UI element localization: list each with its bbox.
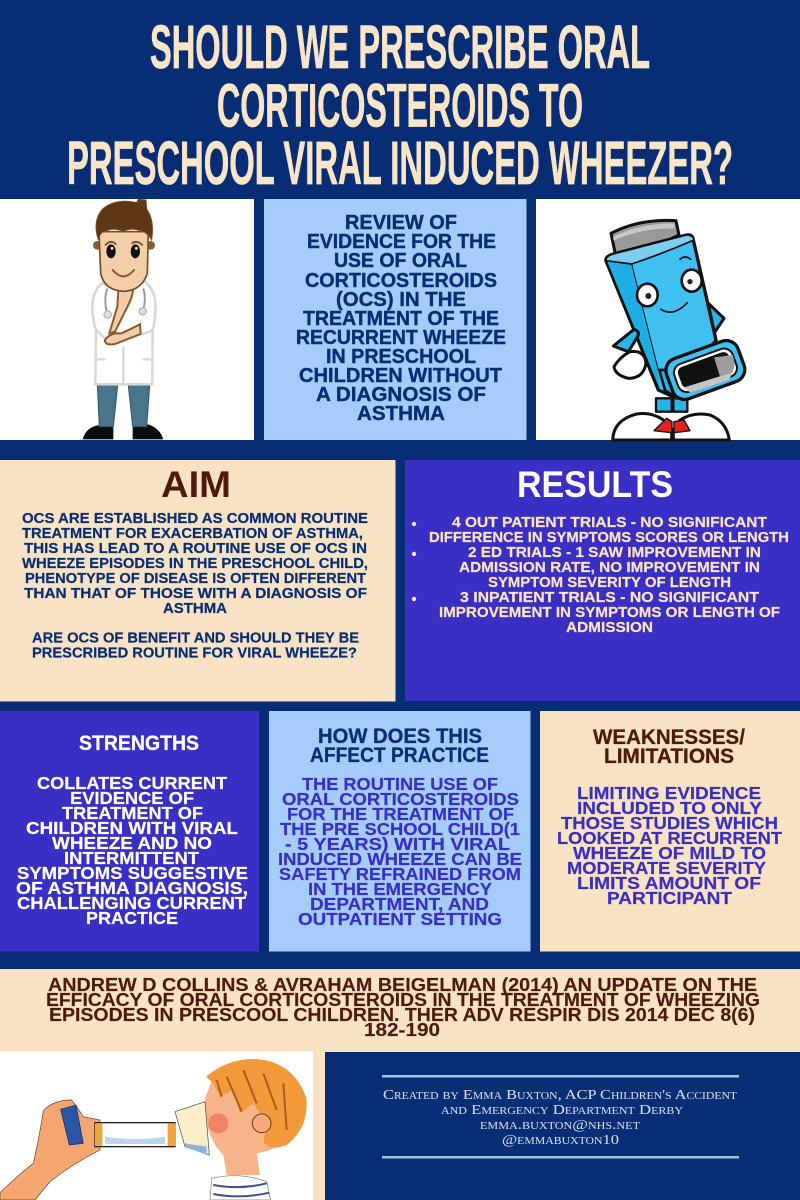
panel: citation (0, 969, 800, 1200)
text block: aim body: OCS ARE ESTABLISHED AS COMMON ROUTINE (22, 511, 368, 527)
heading: strengths: STRENGTHS (79, 732, 199, 755)
text block: strengths body: EVIDENCE OF (70, 788, 194, 808)
heading: results: RESULTS (517, 464, 673, 505)
list: results bullets: DIFFERENCE IN SYMPTOMS SCORES OR LENGTH (429, 530, 789, 546)
list: results bullets: IMPROVEMENT IN SYMPTOMS OR LENGTH OF (439, 605, 780, 621)
list: results bullets: ADMISSION RATE, NO IMPROVEMENT IN (459, 560, 760, 576)
text block: credits: @emmabuxton10 (502, 1133, 619, 1148)
text block: strengths body: TREATMENT OF (62, 803, 203, 823)
panel: review of evidence: RECURRENT WHEEZE (296, 326, 506, 349)
text block: weaknesses body: INCLUDED TO ONLY (577, 798, 762, 818)
text block: practice body: ORAL CORTICOSTEROIDS (282, 789, 519, 809)
panel: review of evidence: TREATMENT OF THE (303, 307, 499, 330)
text block: aim body: THAN THAT OF THOSE WITH A DIAGNOSIS OF (24, 586, 367, 602)
text block: practice body: INDUCED WHEEZE CAN BE (278, 849, 522, 869)
text block: strengths body: COLLATES CURRENT (37, 773, 227, 793)
text block: weaknesses body: PARTICIPANT (607, 888, 732, 908)
panel: review of evidence: EVIDENCE FOR THE (307, 230, 496, 253)
text block: weaknesses body (557, 783, 782, 908)
icon: child with inhaler spacer (0, 1059, 307, 1200)
panel: review of evidence (264, 199, 526, 440)
panel: review of evidence: (OCS) IN THE (336, 288, 466, 311)
panel: citation: 182-190 (364, 1020, 440, 1040)
panel: credits (325, 1052, 800, 1200)
panel: citation: ANDREW D COLLINS & AVRAHAM BEIGELMAN (2014) AN UPDATE ON THE (48, 975, 757, 995)
text block: weaknesses body: WHEEZE OF MILD TO (573, 843, 766, 863)
heading: how does this affect practice: AFFECT PRACTICE (310, 744, 489, 767)
panel: review of evidence: IN PRESCHOOL (326, 345, 476, 368)
panel: how does this affect practice (269, 711, 530, 952)
text block: aim body: ARE OCS OF BENEFIT AND SHOULD THEY BE (32, 630, 359, 646)
text block: practice body: SAFETY REFRAINED FROM (279, 864, 521, 884)
panel: doctor illustration (0, 199, 254, 440)
text block: practice body: DEPARTMENT, AND (310, 894, 489, 914)
text block: weaknesses body: LIMITS AMOUNT OF (577, 873, 761, 893)
text block: strengths body: PRACTICE (86, 908, 178, 928)
title (67, 13, 733, 197)
panel: review of evidence: CORTICOSTEROIDS (305, 269, 497, 292)
panel: strengths (0, 711, 259, 952)
icon: inhaler cartoon (606, 220, 748, 440)
panel: results (405, 460, 800, 701)
list: results bullets: 4 OUT PATIENT TRIALS - NO SIGNIFICANT (452, 515, 767, 531)
text block: aim body: TREATMENT FOR EXACERBATION OF ASTHMA, (22, 526, 363, 542)
panel: review of evidence: CHILDREN WITHOUT (299, 364, 502, 387)
heading: how does this affect practice: HOW DOES THIS (318, 725, 482, 748)
list: results bullets (412, 515, 789, 636)
text block: strengths body (16, 773, 248, 928)
text block: aim body: ASTHMA (163, 601, 228, 617)
text block: practice body: FOR THE TREATMENT OF (287, 804, 514, 824)
text block: credits: Created by Emma Buxton, ACP Children's Accident (383, 1088, 737, 1103)
panel: review of evidence: A DIAGNOSIS OF (316, 383, 486, 406)
text block: practice body (278, 774, 522, 929)
text block: practice body: IN THE EMERGENCY (308, 879, 492, 899)
panel: weaknesses and limitations (540, 711, 800, 952)
text block: aim body: WHEEZE EPISODES IN THE PRESCHOOL CHILD, (22, 556, 368, 572)
text block: aim body: PRESCRIBED ROUTINE FOR VIRAL WHEEZE? (32, 646, 357, 662)
text block: credits (383, 1088, 737, 1148)
list: results bullets: 3 INPATIENT TRIALS - NO SIGNIFICANT (460, 590, 759, 606)
text block: credits: and Emergency Department Derby (441, 1103, 683, 1118)
heading: how does this affect practice (310, 725, 489, 767)
text block: aim body (22, 511, 368, 662)
text block: credits: emma.buxton@nhs.net (480, 1118, 640, 1133)
text block: weaknesses body: MODERATE SEVERITY (567, 858, 766, 878)
text block: practice body: THE PRE SCHOOL CHILD(1 (280, 819, 520, 839)
panel: aim (0, 460, 396, 702)
panel: citation: EPISODES IN PRESCOOL CHILDREN. THER ADV RESPIR DIS 2014 DEC 8(6) (49, 1005, 755, 1025)
text block: strengths body: WHEEZE AND NO (52, 833, 212, 853)
heading: aim: AIM (161, 464, 231, 505)
list: results bullets: ADMISSION (566, 620, 653, 636)
panel: child using spacer illustration (0, 1051, 313, 1200)
panel: review of evidence: USE OF ORAL (334, 249, 467, 272)
list: results bullets: 2 ED TRIALS - 1 SAW IMPROVEMENT IN (468, 545, 761, 561)
text block: aim body: THIS HAS LEAD TO A ROUTINE USE OF OCS IN (24, 541, 367, 557)
heading: weaknesses limitations: LIMITATIONS (604, 745, 734, 768)
text block: practice body: OUTPATIENT SETTING (298, 909, 502, 929)
panel: review of evidence: ASTHMA (357, 402, 445, 425)
text block: practice body: THE ROUTINE USE OF (302, 774, 498, 794)
text block: strengths body: OF ASTHMA DIAGNOSIS, (16, 878, 248, 898)
text block: weaknesses body: LOOKED AT RECURRENT (557, 828, 782, 848)
text block: strengths body: SYMPTOMS SUGGESTIVE (17, 863, 248, 883)
panel: citation: EFFICACY OF ORAL CORTICOSTEROIDS IN THE TREATMENT OF WHEEZING (46, 990, 760, 1010)
panel: inhaler illustration (536, 199, 800, 440)
text block: strengths body: CHALLENGING CURRENT (17, 893, 246, 913)
list: results bullets: SYMPTOM SEVERITY OF LENGTH (488, 575, 731, 591)
panel: review of evidence: REVIEW OF (345, 211, 457, 234)
text block: practice body: - 5 YEARS) WITH VIRAL (285, 834, 510, 854)
text block: strengths body: INTERMITTENT (64, 848, 199, 868)
heading: weaknesses limitations: WEAKNESSES/ (593, 726, 745, 749)
heading: weaknesses limitations (593, 726, 745, 768)
text block: weaknesses body: LIMITING EVIDENCE (577, 783, 761, 803)
icon: doctor cartoon (83, 199, 163, 439)
text block: weaknesses body: THOSE STUDIES WHICH (561, 813, 778, 833)
text block: aim body: PHENOTYPE OF DISEASE IS OFTEN DIFFERENT (25, 571, 366, 587)
text block: strengths body: CHILDREN WITH VIRAL (26, 818, 238, 838)
